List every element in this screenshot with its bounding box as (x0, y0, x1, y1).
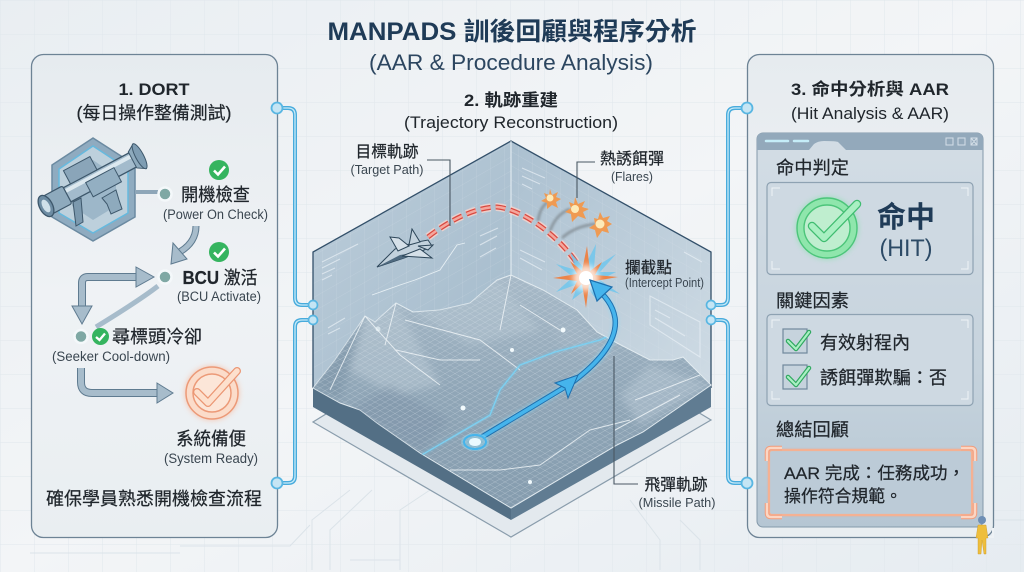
missile head arrow (590, 280, 612, 301)
3D terrain scene (313, 141, 713, 537)
target path dashes (428, 207, 576, 262)
label: system ready: 系統備便 (176, 429, 246, 449)
text: hit: 命中 (877, 200, 935, 234)
missile path (482, 288, 615, 437)
callout: missile path: (Missile Path) (638, 496, 716, 510)
window: results (757, 133, 983, 527)
label: BCU activate: (BCU Activate) (177, 289, 261, 304)
icon: launcher on hexagon (29, 134, 150, 241)
factor: in range (783, 329, 910, 353)
label: seeker cool-down: (Seeker Cool-down) (52, 349, 170, 364)
icon: check power on (209, 160, 229, 180)
step node: BCU (158, 270, 172, 284)
callout: target path: (Target Path) (350, 163, 424, 177)
panel heading: hit analysis: 3. 命中分析與 AAR (791, 79, 949, 99)
icon: check seeker (92, 328, 109, 345)
label: BCU activate: BCU 激活 (182, 268, 258, 288)
factor: in range: 有效射程內 (820, 333, 910, 353)
factor: flare deception (783, 365, 947, 389)
heading: trajectory reconstruction: (Trajectory Reconstruction) (404, 113, 618, 132)
label: seeker cool-down: 尋標頭冷卻 (112, 327, 202, 347)
wall data text marks (322, 168, 702, 357)
arrow: seeker to ready (81, 368, 173, 403)
panel nodes on scene (308, 300, 716, 324)
heading: trajectory reconstruction (404, 91, 618, 132)
callout: flares (577, 150, 664, 198)
intercept burst (553, 244, 620, 308)
label: system ready: (System Ready) (164, 451, 258, 466)
terrain sparkle points (376, 326, 566, 484)
callout: missile path: 飛彈軌跡 (644, 476, 708, 494)
callout: intercept point: 攔截點 (625, 259, 672, 277)
panel heading: hit analysis: (Hit Analysis & AAR) (791, 104, 949, 123)
connectors between panels (277, 108, 747, 483)
text: hit: (HIT) (880, 235, 932, 262)
callout: target path (350, 143, 450, 226)
note: panel summary: 確保學員熟悉開機檢查流程 (46, 489, 262, 509)
icon: small figure (976, 516, 988, 554)
text: hit (877, 200, 935, 262)
wall grids (313, 141, 511, 400)
callout: missile path (614, 356, 716, 510)
window title bar (757, 133, 983, 150)
panel: hit analysis (742, 54, 994, 538)
label: seeker cool-down (52, 327, 202, 364)
box: summary (767, 448, 975, 517)
panel heading: DORT: 1. DORT (118, 80, 190, 99)
slab sides (313, 388, 511, 520)
panel heading: DORT: (每日操作整備測試) (76, 103, 232, 123)
right panel connector nodes (742, 102, 752, 488)
icon: system ready orange check (185, 366, 239, 420)
label: system ready (164, 429, 258, 466)
wall: left (313, 141, 511, 400)
missile launch point (461, 433, 489, 451)
heading: key factors: 關鍵因素 (776, 291, 849, 311)
callout: target path: 目標軌跡 (356, 143, 418, 161)
wall data line chart (372, 243, 465, 295)
step node: power on (158, 188, 172, 200)
panel: DORT (29, 54, 277, 538)
arrow: loop to seeker (72, 267, 158, 327)
label: power on check (163, 185, 268, 222)
wall edges (313, 141, 711, 388)
icon: check BCU (209, 242, 229, 262)
heading: hit verdict: 命中判定 (776, 158, 849, 178)
arrow: power on to BCU (171, 226, 196, 264)
label: power on check: 開機檢查 (181, 185, 250, 205)
box: summary: AAR 完成：任務成功， (784, 464, 965, 483)
heading: summary: 總結回顧 (776, 420, 849, 440)
icon: jet (377, 229, 433, 267)
connector: launcher to power on (135, 190, 158, 194)
box: summary: 操作符合規範。 (784, 487, 902, 506)
wall: right (511, 141, 711, 400)
right panel corner behind figure (984, 528, 993, 537)
callout: flares: 熱誘餌彈 (600, 150, 664, 168)
callout: intercept point (625, 259, 704, 290)
panel heading: hit analysis (791, 79, 949, 123)
title: MANPADS 訓後回顧與程序分析 (328, 18, 696, 46)
box: hit verdict (767, 182, 973, 274)
title (328, 18, 696, 75)
label: power on check: (Power On Check) (163, 207, 268, 222)
callout: intercept point: (Intercept Point) (625, 276, 704, 290)
missile mid arrow (555, 375, 578, 398)
panel heading: DORT (76, 80, 232, 123)
base plate (313, 300, 711, 537)
panel edge nodes (272, 102, 282, 488)
terrain surface (313, 275, 711, 508)
factor: flare deception: 誘餌彈欺騙：否 (820, 368, 947, 388)
callout: flares: (Flares) (611, 170, 653, 184)
label: BCU activate (177, 268, 261, 304)
icon: green check (796, 197, 858, 259)
river glow line (420, 336, 608, 456)
box: key factors (767, 314, 973, 406)
heading: trajectory reconstruction: 2. 軌跡重建 (464, 91, 558, 110)
title: (AAR & Procedure Analysis) (369, 50, 653, 75)
terrain shading (313, 280, 711, 453)
step node: seeker (74, 330, 88, 343)
icon: flares (538, 189, 612, 238)
